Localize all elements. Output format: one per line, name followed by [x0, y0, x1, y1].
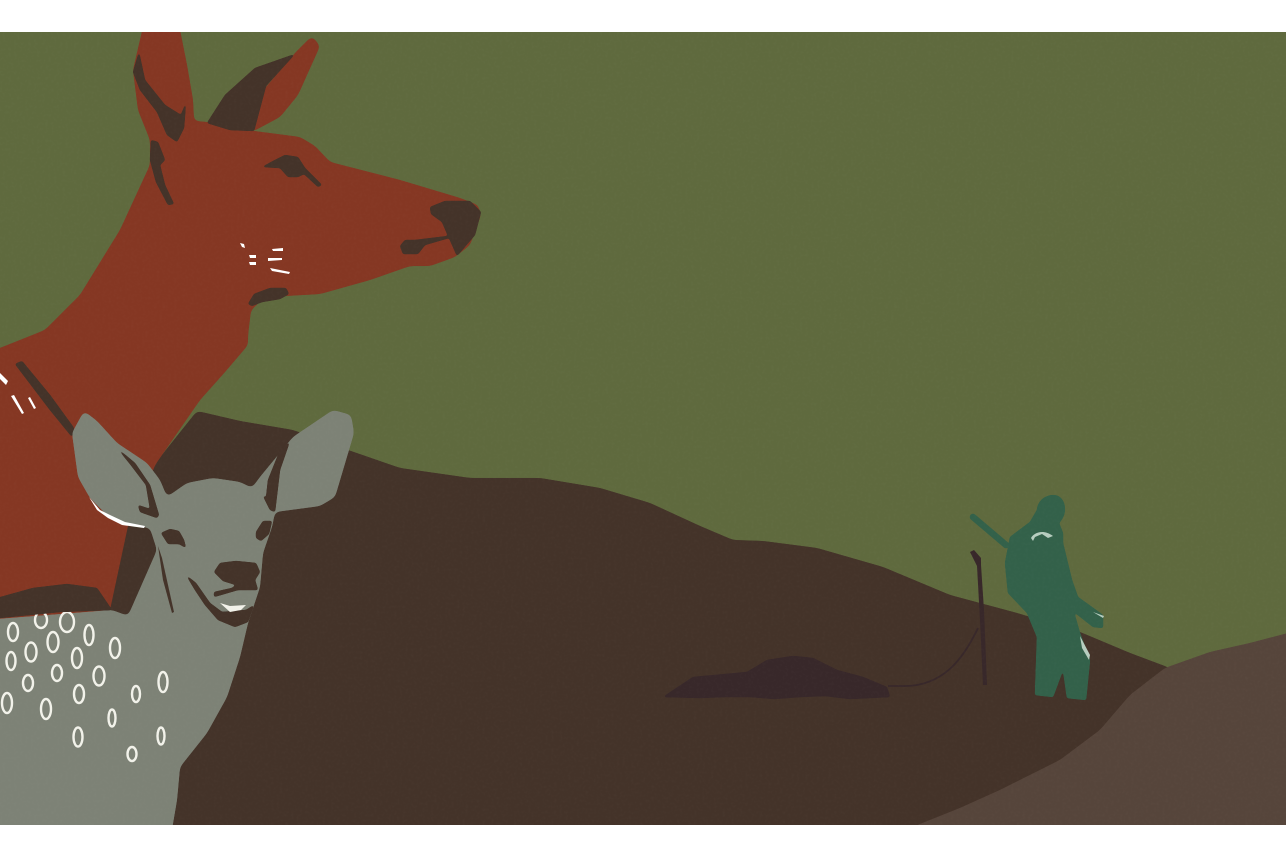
dark brown hill [142, 412, 1168, 825]
doe collar stripe [15, 361, 74, 437]
fawn jaw shadow [186, 575, 254, 627]
fawn ear white highlight [89, 497, 145, 528]
doe throat shadow [248, 288, 289, 306]
hunter leg highlight [1080, 636, 1090, 660]
hunter [973, 495, 1104, 700]
doe neck mark by ear [150, 140, 174, 205]
doe left ear inner mark [133, 52, 186, 142]
fawn [0, 410, 354, 857]
fawn left eye [161, 529, 186, 548]
shadow over fawn back [0, 584, 112, 619]
hunter hand highlight [1093, 612, 1104, 618]
fawn left ear inner [120, 452, 159, 518]
walking stick [970, 550, 987, 685]
fawn right ear inner [264, 443, 289, 512]
fawn white spots [2, 612, 168, 761]
doe [0, 10, 481, 625]
fawn teeth [220, 603, 246, 612]
doe white flecks [0, 243, 290, 414]
doe nose and mouth [400, 201, 481, 256]
doe right ear [254, 38, 319, 130]
fawn body, head and ears [0, 410, 354, 857]
carcass mound [663, 656, 890, 699]
doe body and head [0, 10, 481, 625]
hunter silhouette [1005, 495, 1103, 700]
lighter foreground hill [918, 634, 1286, 825]
hunter collar highlight [1031, 532, 1053, 541]
rope [888, 628, 978, 686]
fawn cheek line [158, 546, 174, 613]
hunter rifle [973, 517, 1006, 545]
fawn nose and mouth [214, 561, 260, 597]
shadow between doe and fawn [110, 526, 143, 614]
fawn right eye [256, 521, 272, 541]
doe eye [262, 155, 322, 187]
background: olive sky [0, 32, 1286, 668]
doe ear shadow [207, 54, 295, 131]
